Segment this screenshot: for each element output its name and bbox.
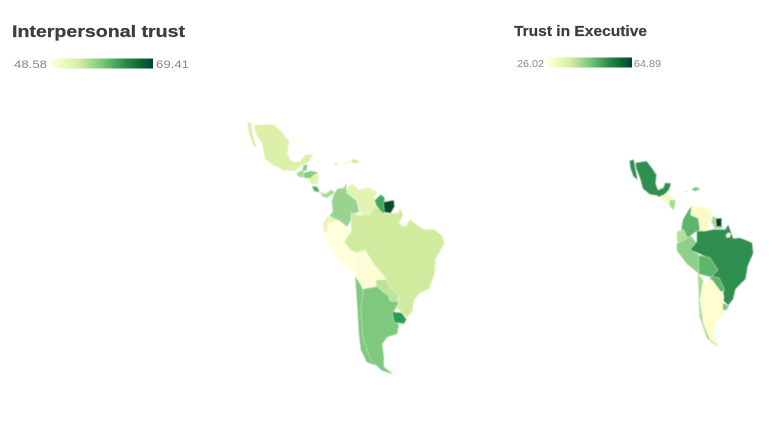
- legend: Trust in Executive: [517, 58, 661, 70]
- map: Trust in Executive: [629, 159, 753, 347]
- legend: Interpersonal trust: 48.58: [14, 59, 47, 71]
- legend: Trust in Executive: 26.02: [517, 58, 544, 70]
- legend: Trust in Executive: 64.89: [634, 58, 661, 70]
- legend: Interpersonal trust: 69.41: [156, 59, 189, 71]
- map: Interpersonal trust: [247, 122, 445, 375]
- title: Trust in Executive: Trust in Executive: [514, 23, 647, 40]
- legend: Interpersonal trust: [14, 58, 189, 71]
- title: Interpersonal trust: Interpersonal trust: [12, 22, 185, 41]
